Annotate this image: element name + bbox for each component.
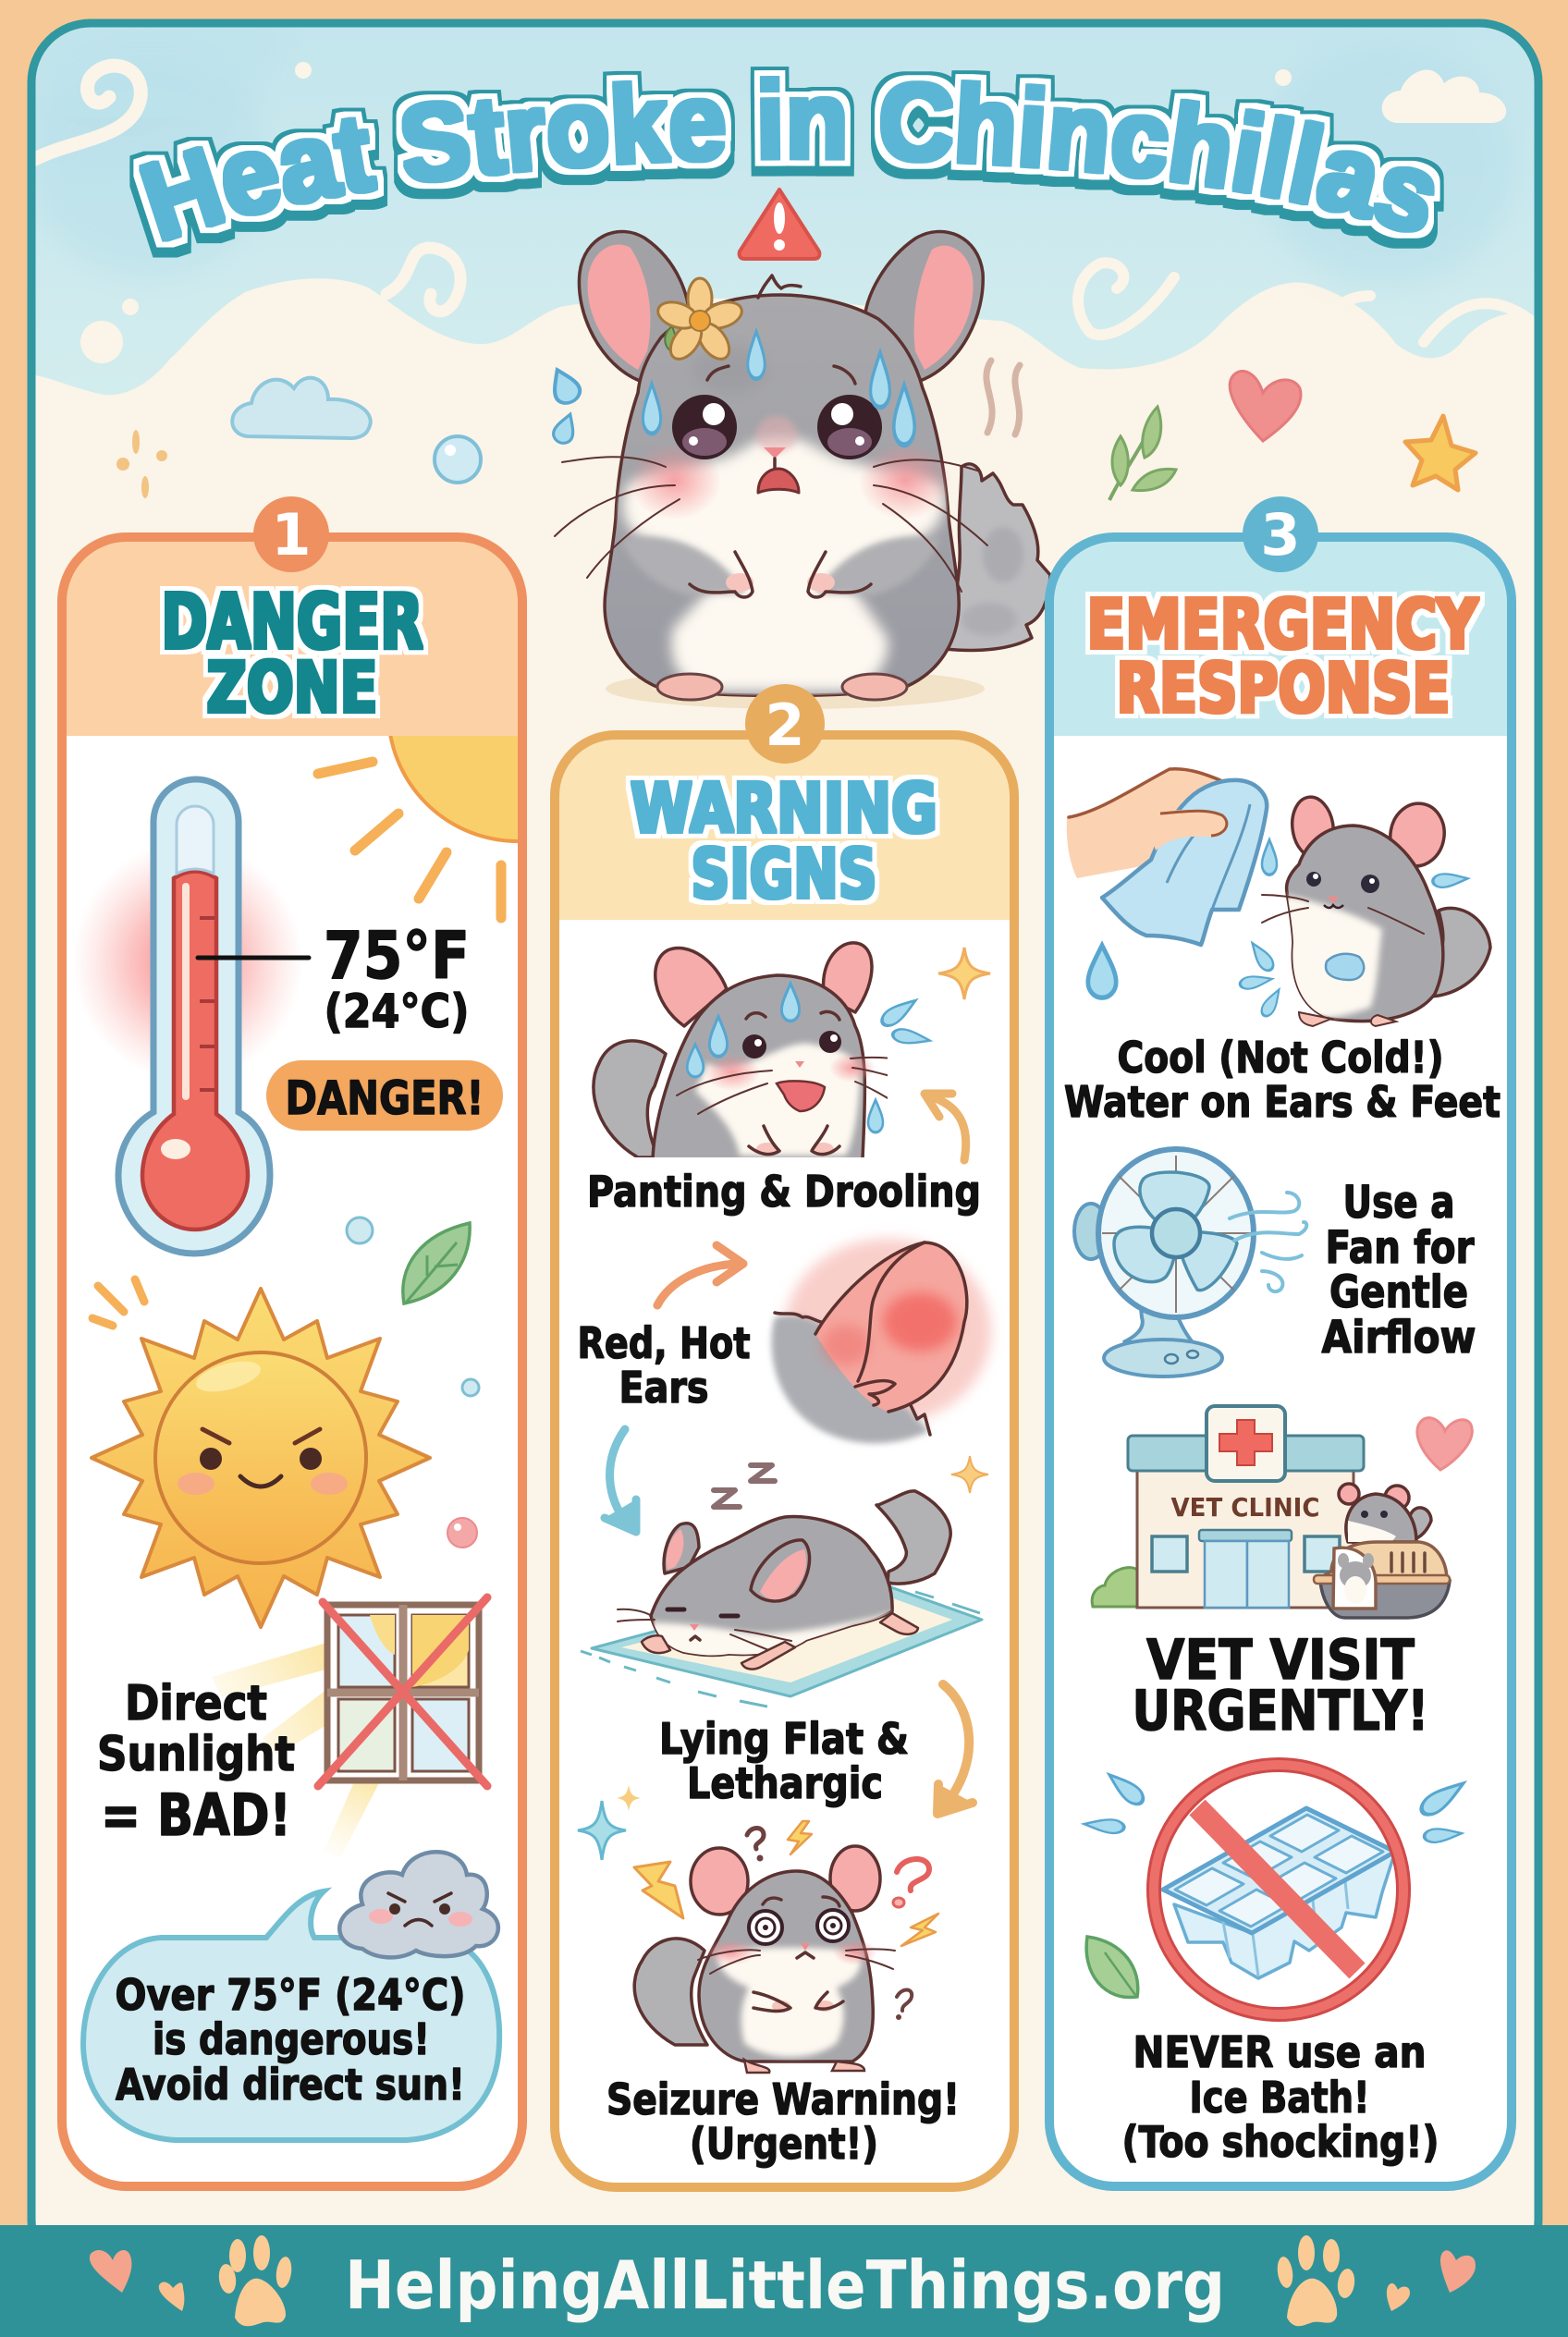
- sun rays: [318, 762, 501, 918]
- feet: [657, 674, 907, 700]
- ground shadow: [606, 668, 985, 709]
- danger pill: [266, 1060, 503, 1131]
- panel 1 header band: [62, 537, 522, 736]
- label: red hot ears: Ears: [619, 1363, 708, 1413]
- panel 2 heading: SIGNS: [692, 835, 876, 914]
- label: direct sunlight: [97, 1676, 295, 1849]
- arrow right: [657, 1245, 743, 1305]
- nose and mouth: [758, 447, 799, 493]
- arrow up-left: [925, 1094, 966, 1160]
- leaf: [1086, 1937, 1138, 1998]
- label: cool water: Water on Ears & Feet: [1064, 1077, 1501, 1127]
- prohibition sign: [1154, 1765, 1403, 2014]
- label: panting: Panting & Drooling: [587, 1167, 981, 1217]
- sweat drops: [545, 331, 914, 446]
- panel 1: danger zone: [57, 496, 527, 2191]
- icon: hand with wet cloth: [1067, 769, 1468, 1019]
- panel 1 heading: [161, 579, 423, 728]
- panel 1 border: [62, 537, 522, 2186]
- arrow down orange: [937, 1684, 973, 1814]
- icon: fan: [1074, 1149, 1254, 1377]
- chinchilla on carrier: [1339, 1484, 1431, 1542]
- panel 3 header band: [1049, 537, 1512, 736]
- label: temperature: [324, 918, 470, 1038]
- decor: leaf sprig: [1109, 407, 1176, 500]
- heart: [1417, 1418, 1472, 1470]
- label: never ice bath: (Too shocking!): [1122, 2117, 1439, 2167]
- speech bubble text: [115, 1970, 466, 2110]
- hearts: [90, 2250, 1476, 2311]
- panel 1 heading: DANGER: [161, 579, 423, 667]
- label: never ice bath: NEVER use an: [1133, 2027, 1426, 2077]
- white fur patches: [621, 347, 944, 691]
- label: red hot ears: Red, Hot: [577, 1318, 751, 1368]
- sparkle: [938, 948, 990, 999]
- heat wisps: [986, 361, 1020, 434]
- leaf: [403, 1223, 470, 1303]
- chinchilla: lying flat on mat: [581, 1491, 982, 1707]
- icon: angry cloud: [339, 1852, 498, 1957]
- bolts and question marks: [634, 1821, 938, 2020]
- decor: star: [1405, 416, 1476, 490]
- panel 3 heading: [1087, 585, 1479, 728]
- body: [605, 295, 959, 695]
- panel 3 number badge: 3: [1260, 501, 1301, 569]
- label: temperature: (24°C): [324, 985, 470, 1038]
- vet clinic sign text: VET CLINIC: [1170, 1492, 1320, 1523]
- label: lying flat: Lethargic: [687, 1758, 883, 1808]
- eyes: [672, 395, 882, 459]
- label: red hot ears: [577, 1318, 751, 1413]
- speech bubble: [83, 1891, 499, 2140]
- label: use a fan: Airflow: [1322, 1312, 1476, 1364]
- cheeks: [629, 442, 951, 520]
- zzz: [714, 1465, 775, 1507]
- flower: [655, 278, 745, 364]
- pink bubble: [447, 1518, 477, 1548]
- chinchilla: holding cloth: [1262, 794, 1490, 1026]
- footer site name: HelpingAllLittleThings.org: [345, 2246, 1225, 2324]
- danger pill: DANGER!: [285, 1071, 484, 1125]
- label: use a fan: Gentle: [1329, 1266, 1468, 1318]
- speech bubble text: Over 75°F (24°C): [115, 1970, 466, 2020]
- label: vet visit: URGENTLY!: [1132, 1679, 1429, 1744]
- label: seizure warning: [606, 2074, 960, 2169]
- chinchilla: seizure: [634, 1846, 895, 2073]
- panel 2 border: [555, 735, 1014, 2187]
- speech bubble text: is dangerous!: [153, 2014, 430, 2064]
- panel 2 card: [555, 735, 1014, 2187]
- pet carrier: [1314, 1542, 1450, 1618]
- icon: angry sun: [92, 1289, 430, 1627]
- label: temperature: 75°F: [324, 918, 470, 994]
- label: direct sunlight: = BAD!: [101, 1781, 291, 1849]
- hero chinchilla: [545, 231, 1050, 709]
- panel 3 heading: EMERGENCY: [1087, 585, 1479, 665]
- icon: red hot ear: [772, 1239, 991, 1443]
- label: never ice bath: Ice Bath!: [1189, 2073, 1370, 2123]
- splash drops: [1084, 1768, 1468, 1843]
- title: Heat Stroke in Chinchillas: [129, 67, 1444, 258]
- chinchilla: panting: [594, 943, 911, 1159]
- panel 3: emergency response: [1049, 496, 1512, 2186]
- sun dashes: [92, 1279, 144, 1326]
- panel 2 number badge: 2: [765, 691, 805, 759]
- left paw: [217, 2235, 293, 2326]
- icon: crossed-out window: [318, 1597, 487, 1786]
- panel 2 heading: WARNING: [631, 769, 937, 849]
- sun beams through window: [212, 1638, 393, 1858]
- panel 1 heading: ZONE: [207, 646, 377, 728]
- tail: [945, 464, 1050, 651]
- bubbles: [347, 1217, 479, 1396]
- label: direct sunlight: Sunlight: [97, 1727, 295, 1782]
- label: lying flat: Lying Flat &: [659, 1714, 909, 1764]
- label: use a fan: Fan for: [1326, 1222, 1475, 1274]
- decor: sparkle dots: [116, 430, 167, 498]
- sky background with waves: [28, 23, 1538, 395]
- sparkles: [578, 1785, 641, 1860]
- speech bubble text: Avoid direct sun!: [116, 2060, 465, 2110]
- panel 3 card: [1049, 537, 1512, 2186]
- panel 3 heading: RESPONSE: [1117, 649, 1450, 728]
- arrow down blue: [605, 1429, 636, 1532]
- brows: [707, 366, 855, 384]
- decor: small cloud: [232, 378, 371, 438]
- panel 1 number badge: [253, 496, 329, 572]
- decor: bubble: [435, 436, 481, 483]
- panel 1 card: [62, 537, 522, 2186]
- mat: [581, 1576, 982, 1707]
- label: never ice bath: [1122, 2027, 1439, 2167]
- decor: sky cloud top right: [1382, 69, 1506, 123]
- left ear: [579, 231, 690, 381]
- right paw: [1276, 2235, 1356, 2326]
- whiskers: [555, 457, 987, 592]
- icon: thermometer: [72, 779, 303, 1254]
- right ear: [864, 231, 983, 381]
- label: cool water: Cool (Not Cold!): [1117, 1033, 1444, 1083]
- label: cool water: [1064, 1033, 1501, 1127]
- drops: [687, 984, 931, 1132]
- label: lying flat: [659, 1714, 909, 1808]
- label: seizure warning: (Urgent!): [690, 2119, 878, 2169]
- panel 2 header band: [555, 735, 1014, 920]
- label: seizure warning: Seizure Warning!: [606, 2074, 960, 2124]
- wind lines: [1230, 1193, 1306, 1291]
- panel 3 number badge: [1243, 496, 1318, 572]
- label: vet visit: VET VISIT: [1146, 1628, 1415, 1693]
- icon: ice tray: [1163, 1808, 1395, 1978]
- large corner sun: [388, 736, 518, 843]
- panel 3 border: [1049, 537, 1512, 2186]
- sparkle: [951, 1456, 988, 1493]
- label: direct sunlight: Direct: [125, 1676, 267, 1731]
- panel 2: warning signs: [555, 684, 1014, 2187]
- footer: [0, 2225, 1568, 2337]
- leader line: [198, 956, 309, 960]
- footer band: [0, 2225, 1568, 2337]
- panel 1 number badge: 1: [271, 501, 312, 569]
- panel 2 heading: [631, 769, 937, 914]
- label: use a fan: Use a: [1342, 1177, 1455, 1229]
- decor: heart: [1230, 371, 1301, 441]
- panel 2 number badge: [745, 684, 825, 764]
- fur tuft: [758, 275, 801, 298]
- icon: vet clinic building: [1092, 1406, 1364, 1608]
- icon: warning triangle: [740, 190, 819, 259]
- label: vet visit: [1132, 1628, 1429, 1744]
- paws: [690, 552, 871, 597]
- label: use a fan: [1322, 1177, 1476, 1364]
